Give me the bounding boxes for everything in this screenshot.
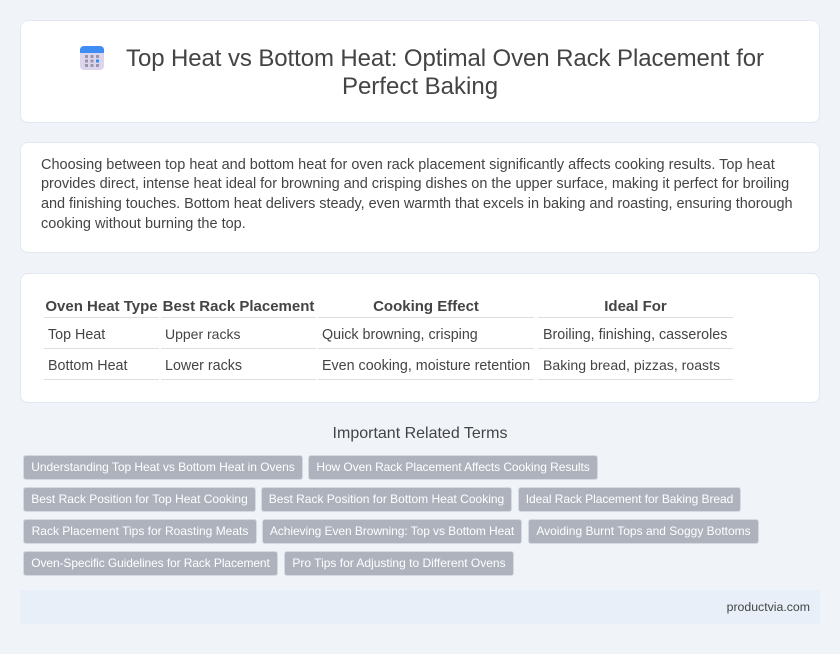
row: top heat: Top Heat (48, 327, 105, 343)
row: bottom heat (48, 357, 720, 374)
row: top heat: Quick browning, crisping (322, 327, 478, 343)
title (126, 45, 764, 100)
row: top heat: Broiling, finishing, casseroles (543, 327, 727, 343)
intro text (41, 156, 793, 232)
tag (23, 551, 278, 576)
tag: Best Rack Position for Top Heat Cooking (31, 492, 248, 506)
tag: Best Rack Position for Bottom Heat Cooking (269, 492, 504, 506)
tag (518, 487, 741, 512)
comparison table (44, 298, 733, 380)
tag (528, 519, 759, 544)
related terms tags (23, 455, 759, 576)
column header: oven heat type: Oven Heat Type (45, 298, 158, 315)
tag: Avoiding Burnt Tops and Soggy Bottoms (536, 524, 751, 538)
intro text: and finishing touches. Bottom heat delivers steady, even warmth that excels in baking and roasting, ensuring thorough (41, 196, 793, 212)
icon: calendar (80, 46, 104, 70)
intro text: provides direct, intense heat ideal for browning and crisping dishes on the upper surface, making it perfect for broiling (41, 176, 789, 192)
row: bottom heat: Even cooking, moisture retention (322, 358, 530, 374)
intro text: cooking without burning the top. (41, 216, 246, 232)
tag (23, 455, 303, 480)
column header: cooking effect: Cooking Effect (373, 298, 479, 315)
tag: Understanding Top Heat vs Bottom Heat in Ovens (31, 460, 295, 474)
row: bottom heat: Baking bread, pizzas, roasts (543, 357, 720, 373)
tag: Rack Placement Tips for Roasting Meats (32, 524, 248, 538)
footer source: productvia.com (727, 600, 810, 614)
intro panel (20, 142, 820, 253)
tag (23, 519, 257, 544)
header panel (20, 20, 820, 123)
row: bottom heat: Lower racks (165, 358, 242, 374)
tag (284, 551, 514, 576)
table panel (20, 273, 820, 403)
column header: ideal for: Ideal For (604, 298, 667, 315)
tag (262, 519, 522, 544)
column header: best rack placement: Best Rack Placement (163, 298, 314, 315)
row: bottom heat: Bottom Heat (48, 358, 127, 374)
tag: How Oven Rack Placement Affects Cooking Results (316, 460, 590, 474)
tag (23, 487, 256, 512)
title: Perfect Baking (342, 73, 498, 100)
tag: Ideal Rack Placement for Baking Bread (526, 492, 733, 506)
tag: Pro Tips for Adjusting to Different Ovens (292, 556, 506, 570)
tag (308, 455, 598, 480)
intro text: Choosing between top heat and bottom heat for oven rack placement significantly affects cooking results. Top heat (41, 156, 775, 172)
footer bar (20, 590, 820, 624)
related terms heading: Important Related Terms (333, 425, 507, 442)
tag: Achieving Even Browning: Top vs Bottom Heat (270, 524, 514, 538)
row: top heat: Upper racks (165, 326, 240, 342)
tag: Oven-Specific Guidelines for Rack Placement (31, 556, 270, 570)
row: top heat (48, 326, 727, 343)
title: Top Heat vs Bottom Heat: Optimal Oven Rack Placement for (126, 45, 764, 72)
tag (261, 487, 512, 512)
